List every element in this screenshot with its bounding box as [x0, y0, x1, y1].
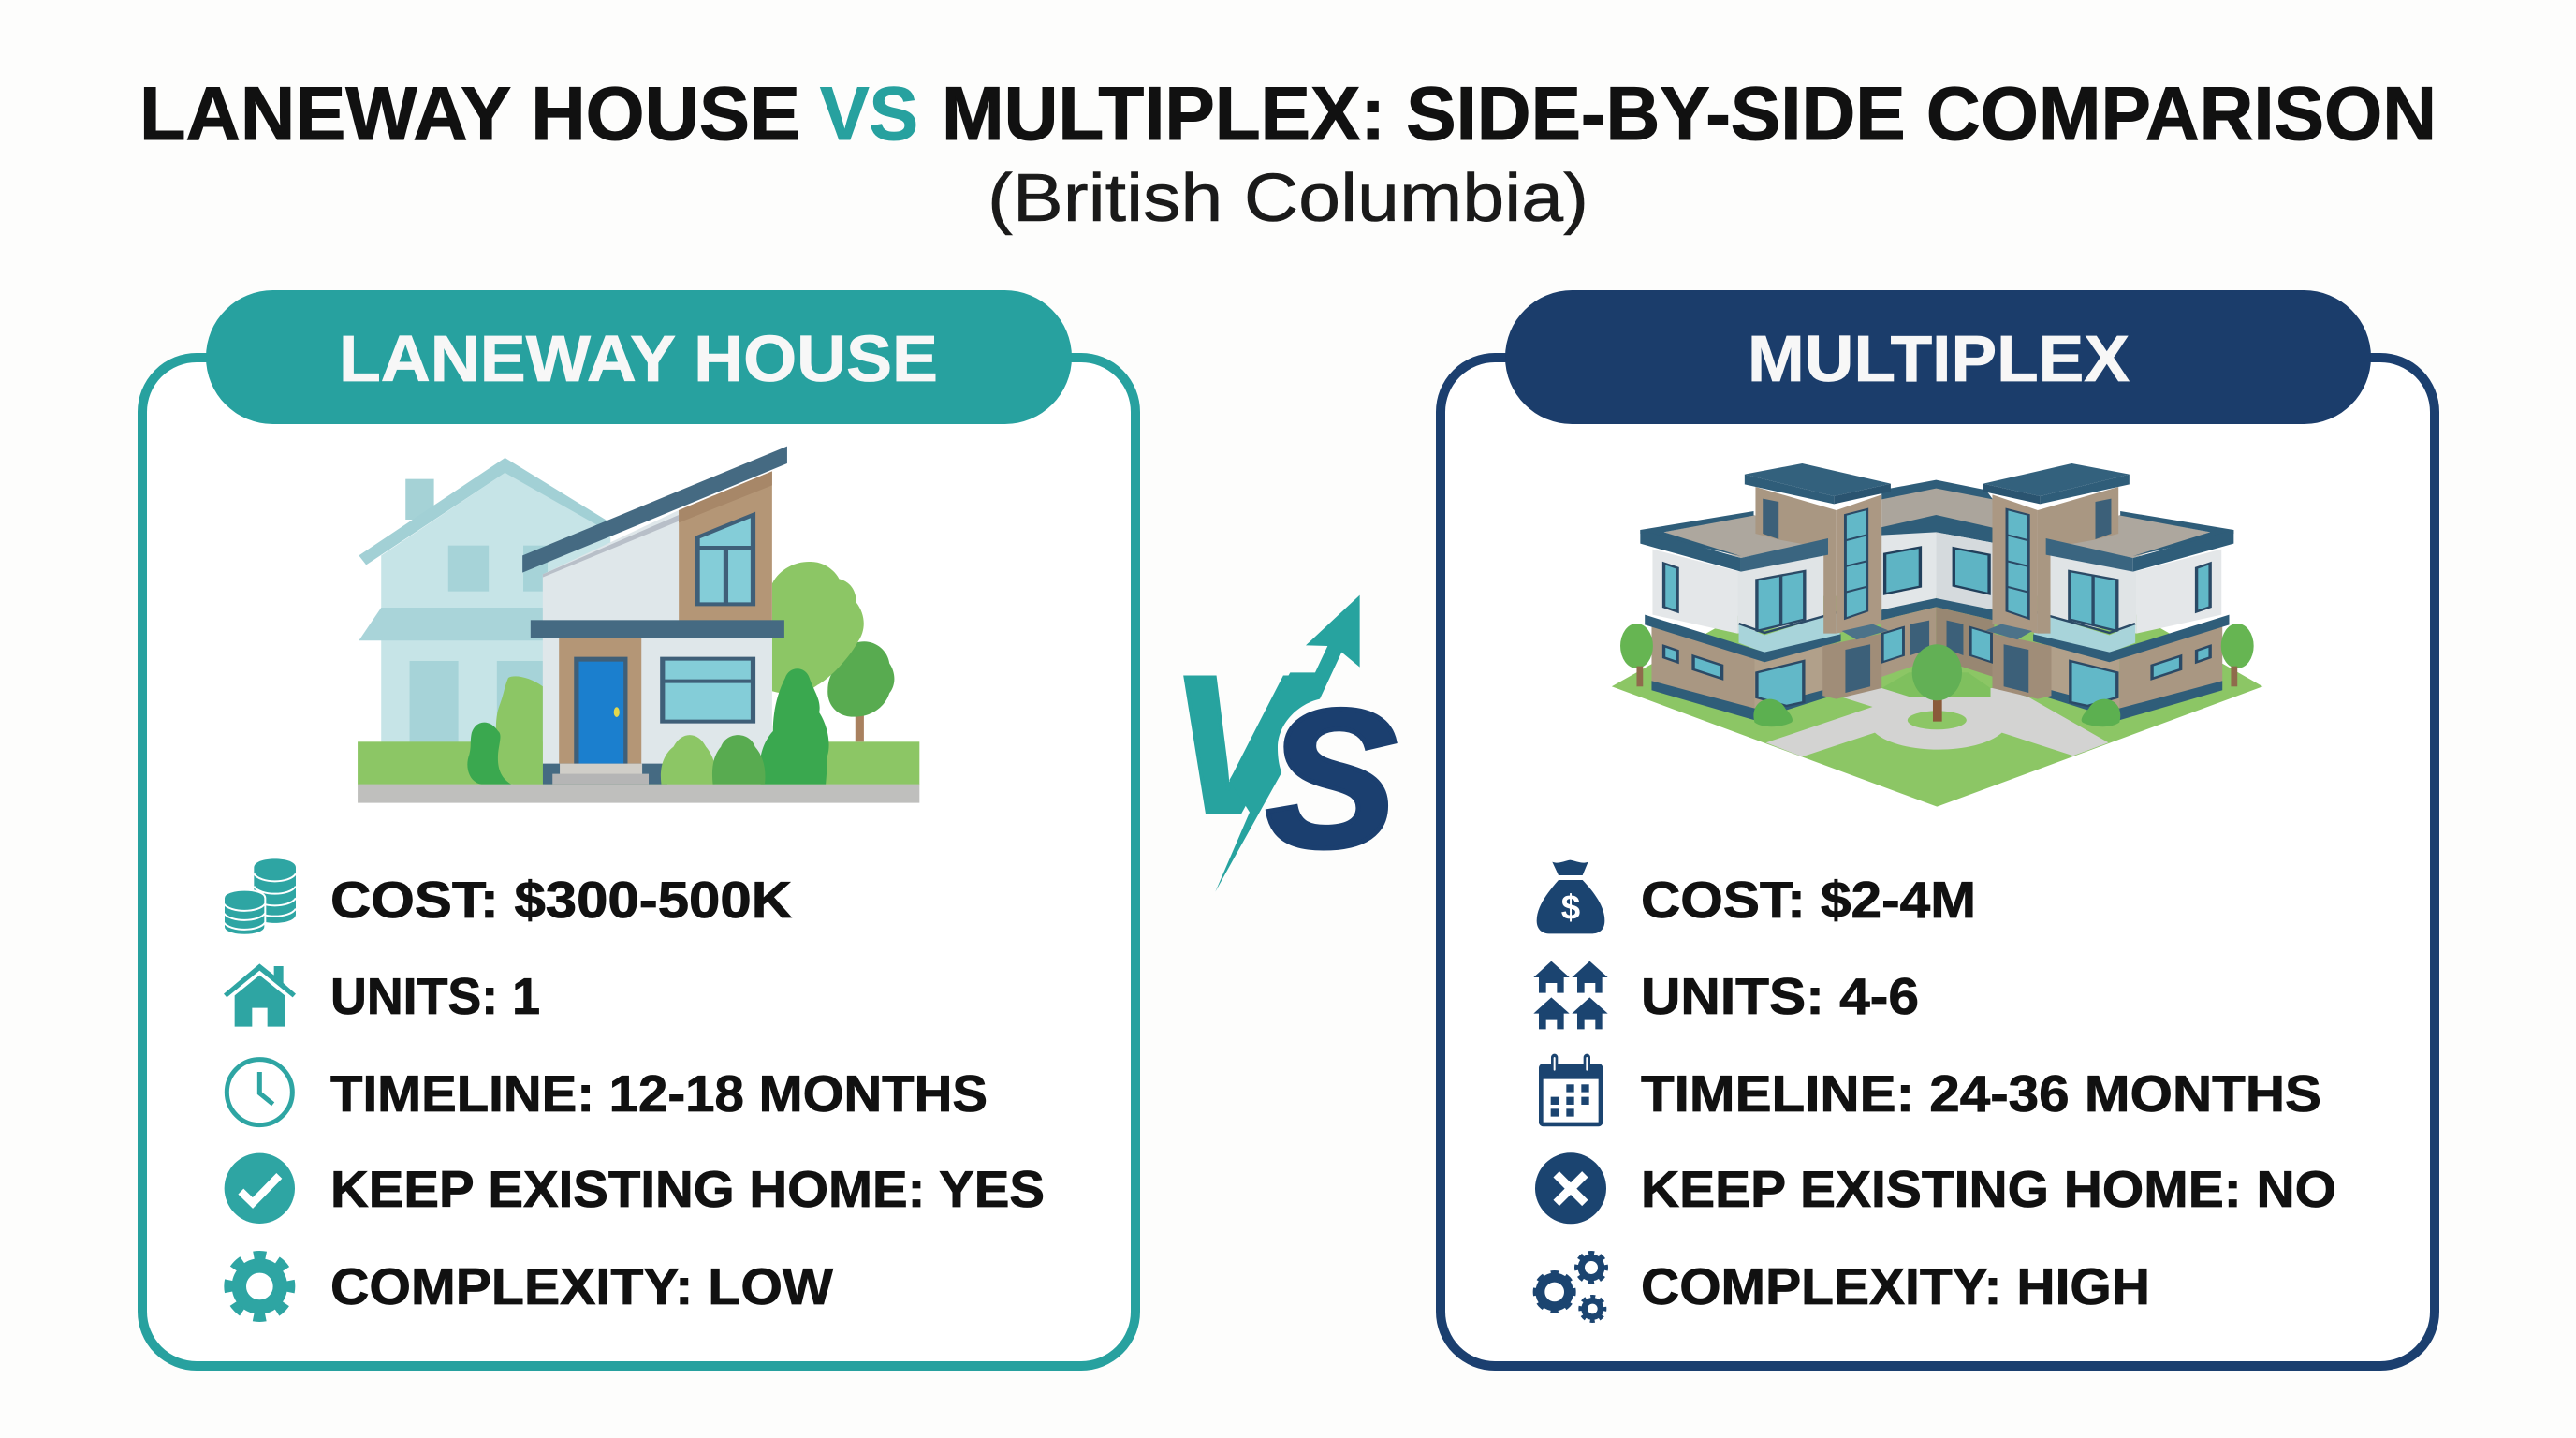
- shrubs: [467, 668, 829, 785]
- heading pill: multiplex: [1505, 290, 2371, 424]
- title: MULTIPLEX: SIDE-BY-SIDE COMPARISON: [942, 72, 2437, 156]
- left wing: [1620, 463, 1903, 726]
- illustration: multiplex building: [1612, 463, 2262, 807]
- title: LANEWAY HOUSE: [139, 72, 800, 156]
- right wing: [1970, 463, 2254, 726]
- roof: [522, 447, 787, 573]
- text: keep existing home: KEEP EXISTING HOME: NO: [1641, 1160, 2336, 1218]
- text: timeline: TIMELINE: 12-18 MONTHS: [330, 1064, 988, 1123]
- text: keep existing home: KEEP EXISTING HOME: YES: [330, 1160, 1045, 1218]
- icon: gear: [228, 1255, 291, 1317]
- arrow and bolt: [1215, 595, 1360, 892]
- icon: clock: [227, 1060, 292, 1125]
- existing house behind: [359, 458, 610, 742]
- tree behind: [772, 562, 894, 741]
- V letter: V: [1169, 636, 1314, 855]
- text: cost: COST: $2-4M: [1641, 871, 1976, 929]
- heading pill: laneway house: [206, 290, 1072, 424]
- panel outline: [1441, 358, 2435, 1366]
- title: [139, 72, 2437, 156]
- central back wing: [1881, 480, 1995, 677]
- icon: coins: [224, 858, 296, 935]
- text: units: UNITS: 1: [330, 967, 540, 1025]
- ground and paths: [1612, 596, 2262, 807]
- courtyard tree: [1912, 644, 1962, 722]
- panel: laneway house: [142, 290, 1135, 1366]
- illustration: laneway house: [358, 447, 919, 803]
- icon: check: [225, 1153, 295, 1224]
- icon: money bag: $: [1561, 888, 1580, 927]
- laneway house walls: [543, 510, 679, 621]
- panel: multiplex: [1441, 290, 2435, 1366]
- heading pill: multiplex: MULTIPLEX: [1748, 322, 2130, 395]
- icon: house: [224, 963, 296, 1027]
- text: timeline: TIMELINE: 24-36 MONTHS: [1641, 1064, 2321, 1123]
- heading pill: laneway house: LANEWAY HOUSE: [339, 322, 938, 395]
- icon: cross: [1535, 1152, 1606, 1224]
- fact list: laneway house: [224, 858, 1045, 1317]
- icon: gears: [1536, 1253, 1606, 1321]
- front door: [574, 657, 627, 765]
- vs badge: [1169, 595, 1401, 892]
- lower window: [663, 659, 753, 722]
- S letter: S: [1266, 669, 1397, 888]
- text: cost: COST: $300-500K: [330, 871, 792, 929]
- upper window: [697, 515, 753, 604]
- lawn and pavement: [358, 741, 919, 803]
- fact list: multiplex: [1533, 860, 2336, 1321]
- text: complexity: COMPLEXITY: LOW: [330, 1257, 833, 1315]
- icon: calendar: [1539, 1057, 1603, 1126]
- steps: [543, 764, 667, 785]
- separator: [1271, 699, 1401, 861]
- icon: money bag: [1537, 860, 1604, 933]
- icon: four houses: [1533, 961, 1608, 1029]
- subtitle: (British Columbia): [988, 161, 1588, 236]
- text: complexity: COMPLEXITY: HIGH: [1641, 1257, 2150, 1315]
- porch overhang: [531, 620, 784, 638]
- text: units: UNITS: 4-6: [1641, 967, 1919, 1025]
- panel outline: [142, 358, 1135, 1366]
- title: VS: [820, 72, 918, 156]
